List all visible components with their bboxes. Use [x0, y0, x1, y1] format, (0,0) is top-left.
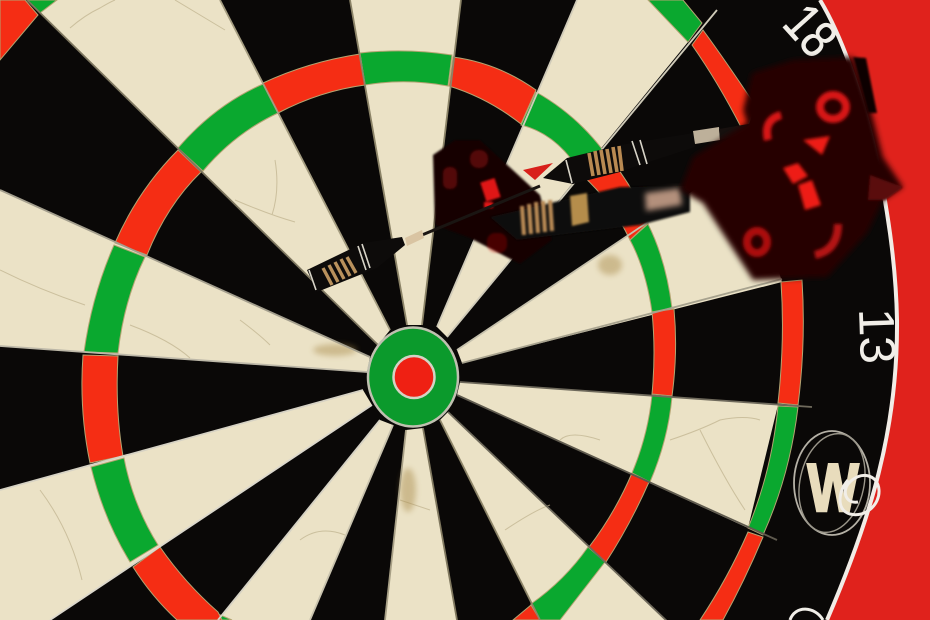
- Winmau logo: [790, 427, 874, 539]
- inner bull: [394, 356, 434, 398]
- wire number 13: 13: [848, 307, 906, 365]
- cracks on the cream sisal: [0, 0, 760, 580]
- dart: front barrel and shaft: [490, 186, 690, 240]
- brown stains: [313, 255, 622, 512]
- wire loop near logo: [840, 475, 879, 515]
- dart: top barrel and shaft: [543, 122, 762, 184]
- dart: front flight: [680, 57, 903, 280]
- outer bull: [368, 328, 458, 426]
- white board edge wire: [820, 0, 897, 620]
- Winmau logo: W: [807, 450, 859, 526]
- red stem behind top dart: [523, 163, 553, 180]
- wire number hook at bottom: [790, 609, 823, 620]
- dart: back shaft and barrel: [307, 186, 540, 292]
- dart: back flight: [433, 140, 552, 264]
